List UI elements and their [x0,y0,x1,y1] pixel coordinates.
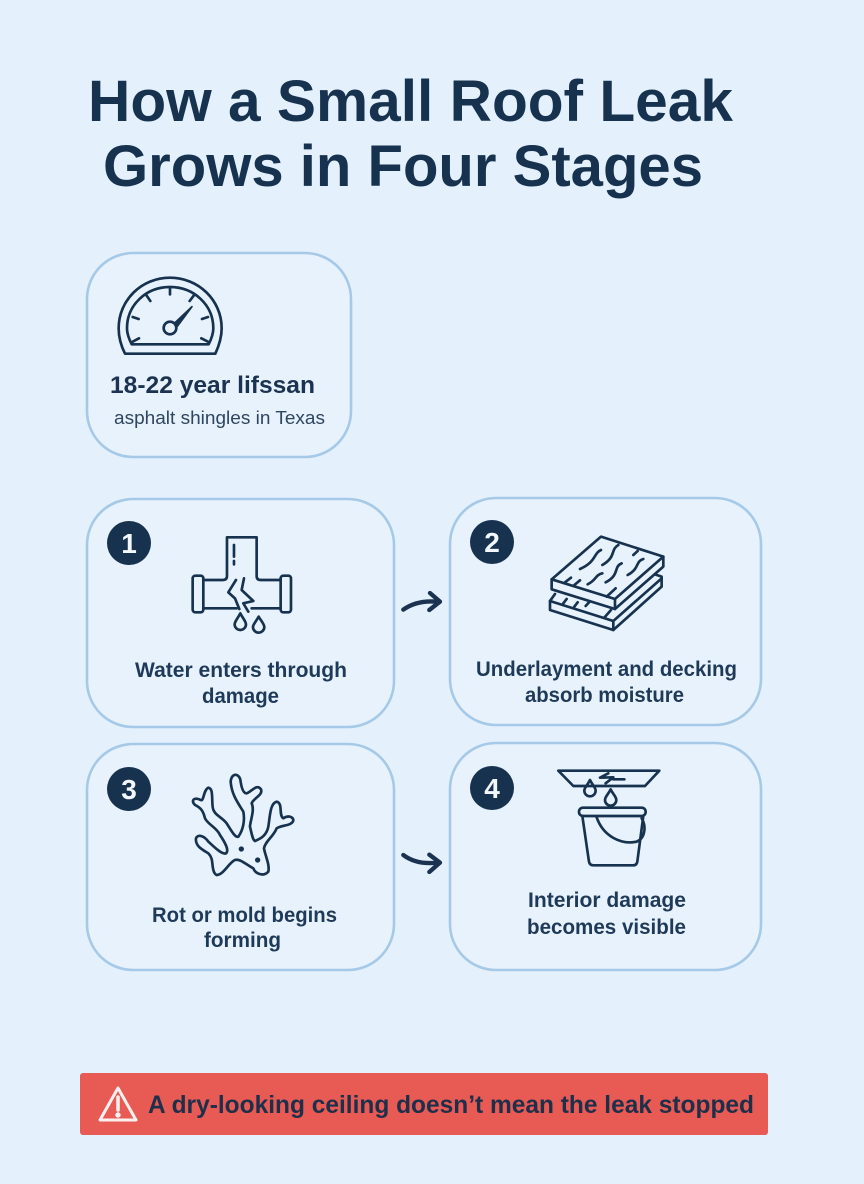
panel: stage 4 [450,743,761,970]
badge 3: 3 [121,774,137,805]
panel: stage 1 [87,499,394,727]
icon: warning triangle [100,1088,136,1120]
arrow: stage 1 to 2 [403,593,440,610]
panel: stage 3: Rot or mold begins [152,904,337,927]
panel: lifespan: asphalt shingles in Texas [114,408,325,428]
badge 2: 2 [484,527,500,558]
badge 1 [107,521,151,565]
panel: stage 1: Water enters through [135,659,347,682]
callout banner: A dry-looking ceiling doesn’t mean the leak stopped [148,1091,754,1119]
icon: ceiling drip and bucket [558,771,659,865]
panel: lifespan: 18-22 year lifssan [110,372,315,399]
panel: stage 2: absorb moisture [525,684,684,707]
panel: stage 1: damage [202,685,279,708]
panel: stage 3 [87,744,394,970]
icon: gauge [119,278,222,354]
badge 1: 1 [121,528,137,559]
callout banner [80,1073,768,1135]
panel: lifespan [87,253,351,457]
panel: stage 2 [450,498,761,725]
panel: stage 2: Underlayment and decking [476,658,737,681]
title: Grows in Four Stages [103,134,703,199]
panel: stage 3: forming [204,929,281,952]
panel: stage 4: Interior damage [528,889,686,912]
icon: wood boards [550,537,663,630]
title: How a Small Roof Leak [88,69,734,134]
badge 4: 4 [484,773,500,804]
badge 3 [107,767,151,811]
icon: cracked pipe [193,537,291,633]
arrow: stage 3 to 4 [403,855,440,872]
badge 4 [470,766,514,810]
title [88,69,734,199]
icon: mold growth [193,775,293,875]
badge 2 [470,520,514,564]
panel: stage 4: becomes visible [527,916,686,939]
